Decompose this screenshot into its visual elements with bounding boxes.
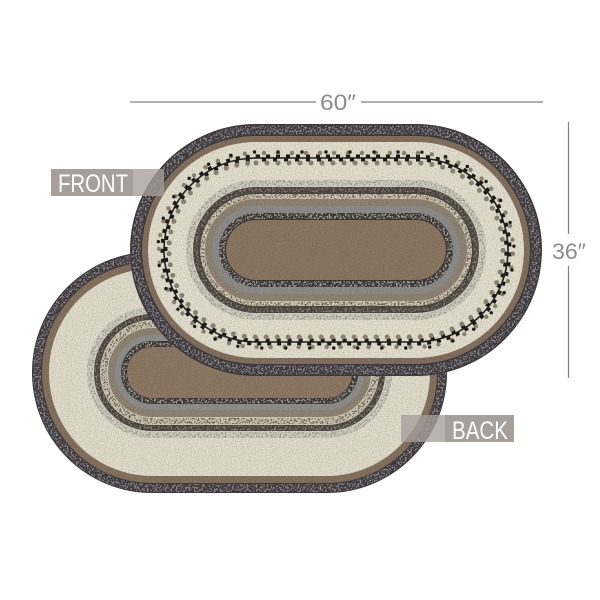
label: FRONT: FRONT	[58, 170, 128, 198]
rug: front side	[130, 124, 542, 376]
label: BACK	[401, 415, 514, 445]
dimension: height 36 inches: 36″	[552, 239, 586, 264]
rug: back side	[32, 252, 447, 493]
label: BACK: BACK	[452, 417, 508, 445]
floral vine border	[158, 152, 514, 348]
dimension: width 60 inches: 60″	[320, 90, 356, 115]
